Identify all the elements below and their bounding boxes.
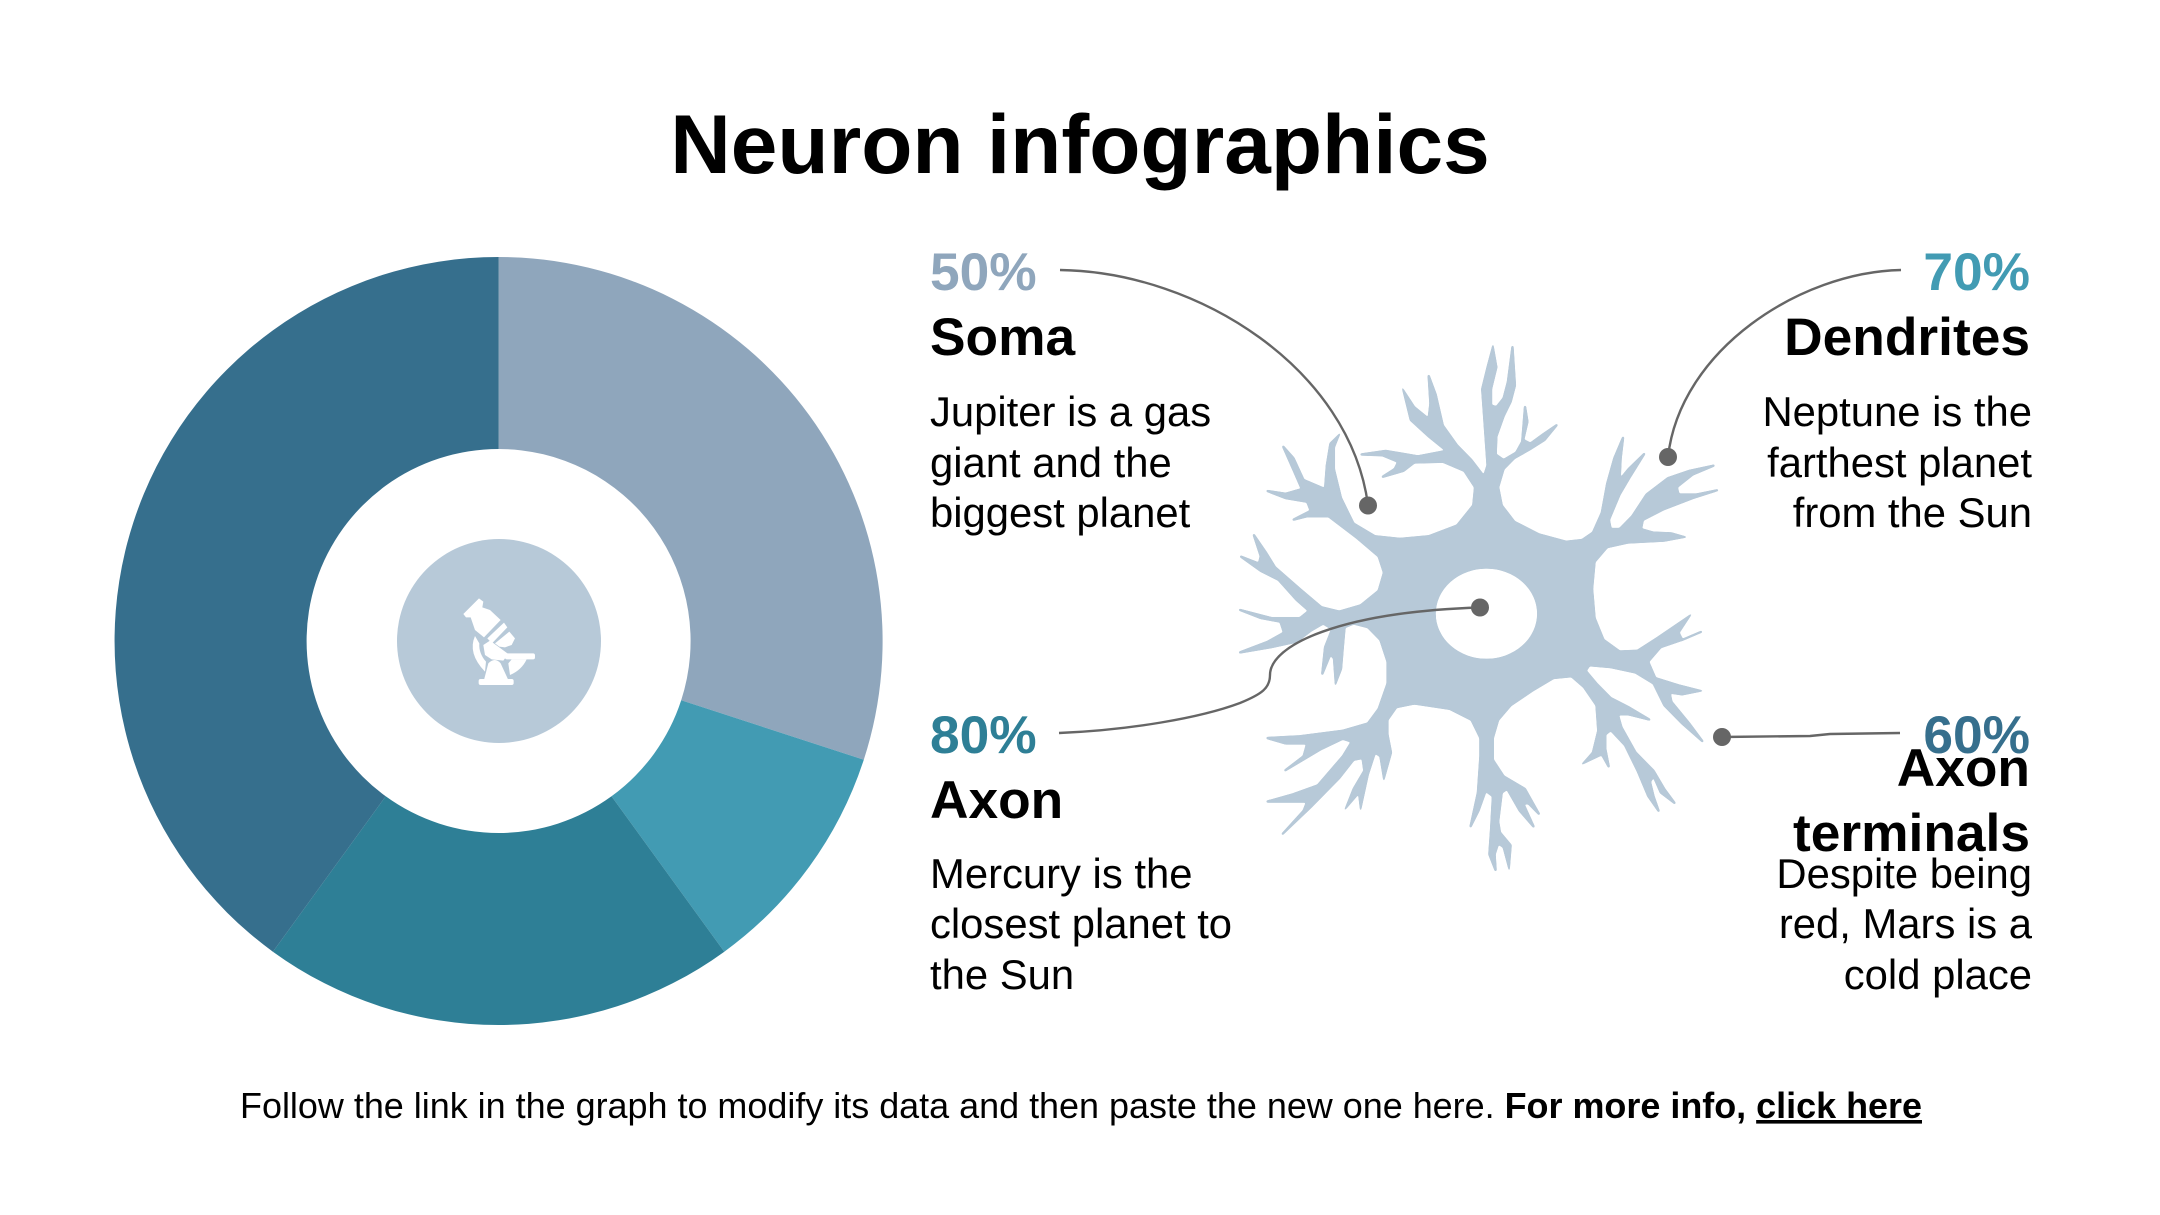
text block: axon terminals: Despite being — [1776, 850, 2032, 897]
icon: microscope in circle — [397, 539, 601, 743]
text block: axon terminals: Axon — [1897, 739, 2030, 798]
text block: axon terminals: red, Mars is a — [1779, 900, 2033, 947]
connector: soma — [1060, 270, 1377, 514]
segment: 10% teal — [612, 700, 864, 952]
connector: dendrites — [1659, 270, 1901, 466]
text block: axon: 80% — [930, 706, 1037, 765]
text block: soma: 50% — [930, 243, 1037, 302]
text block: axon — [930, 706, 1232, 998]
text block: axon: Mercury is the — [930, 850, 1192, 897]
text block: axon terminals: cold place — [1844, 951, 2032, 998]
donut chart — [115, 257, 883, 1025]
text block: dendrites — [1762, 243, 2032, 536]
connector: axon terminals — [1713, 728, 1900, 746]
text block: axon terminals: 60% — [1923, 706, 2030, 765]
text block: soma: biggest planet — [930, 489, 1191, 536]
text block: soma — [930, 243, 1211, 536]
text block: axon: closest planet to — [930, 900, 1232, 947]
footer note: Follow the link in the graph to modify its data and then paste the new one here. For more info, click here — [240, 1085, 1922, 1126]
segment: 40% dark blue — [115, 257, 499, 952]
text block: axon terminals — [1776, 706, 2033, 998]
text block: axon: Axon — [930, 771, 1063, 830]
connector: axon — [1059, 598, 1489, 733]
text block: soma: Soma — [930, 308, 1075, 367]
segment: 20% dark teal — [273, 796, 724, 1025]
text block: dendrites: Dendrites — [1784, 308, 2030, 367]
text block: dendrites: Neptune is the — [1762, 388, 2032, 435]
neuron illustration — [1239, 346, 1718, 871]
text block: dendrites: 70% — [1923, 243, 2030, 302]
text block: axon terminals: terminals — [1793, 804, 2030, 863]
text block: dendrites: farthest planet — [1767, 439, 2032, 486]
text block: soma: giant and the — [930, 439, 1172, 486]
text block: dendrites: from the Sun — [1793, 489, 2032, 536]
title: Neuron infographics — [670, 97, 1490, 191]
text block: axon: the Sun — [930, 951, 1074, 998]
segment: 30% light blue — [499, 257, 883, 760]
text block: soma: Jupiter is a gas — [930, 388, 1211, 435]
